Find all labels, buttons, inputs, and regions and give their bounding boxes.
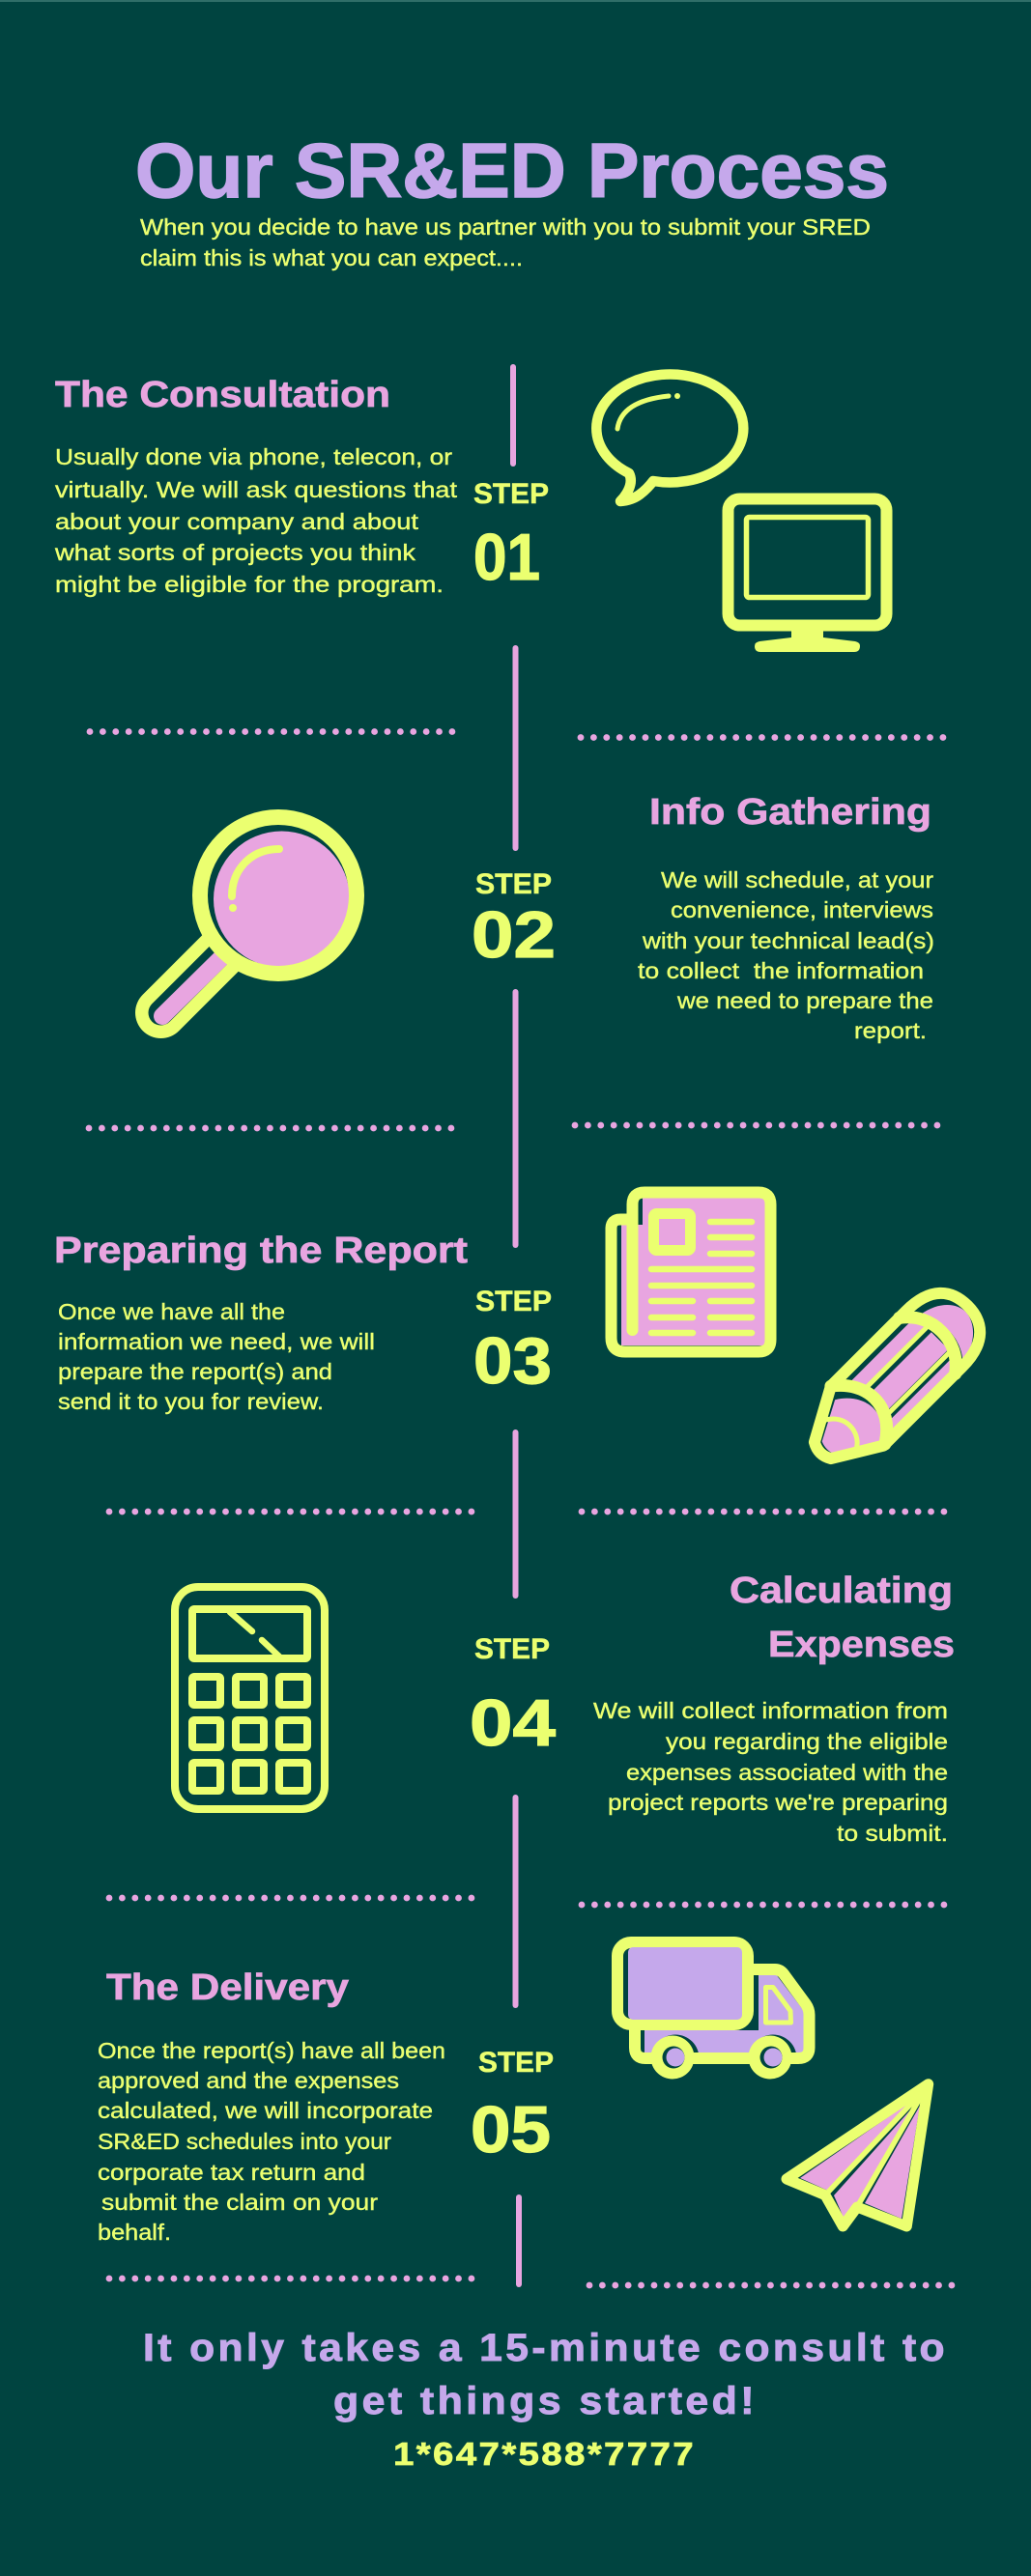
step label 02 [472, 868, 556, 972]
subtitle: claim this is what you can expect.... [140, 245, 523, 270]
step label 03: 03 [473, 1324, 552, 1398]
text block: expenses description: expenses associated with the [626, 1760, 948, 1785]
icon: delivery truck [617, 1942, 810, 2082]
step label 03: STEP [475, 1286, 552, 1317]
text block: report description: Once we have all the [58, 1299, 285, 1324]
text block: expenses description: We will collect information from [593, 1698, 948, 1723]
text block: info gathering description: with your technical lead(s) [642, 928, 934, 953]
step label 01: 01 [473, 521, 540, 594]
step label 04 [470, 1633, 556, 1760]
panel: step 1 the consultation [54, 374, 887, 652]
text block: expenses description: project reports we're preparing [608, 1790, 948, 1815]
heading: calculating expenses: Calculating [730, 1571, 953, 1611]
heading: the consultation: The Consultation [55, 375, 390, 415]
subtitle: When you decide to have us partner with you to submit your SRED [140, 214, 871, 240]
step label 01: STEP [473, 478, 549, 510]
icon: newspaper [611, 1192, 771, 1352]
icon: speech bubble [596, 374, 743, 501]
text block: consultation description [54, 444, 458, 597]
callout: closing message [143, 2327, 948, 2472]
icon: paper plane [787, 2084, 929, 2226]
text block: expenses description: to submit. [837, 1821, 948, 1846]
icon: magnifying glass [160, 817, 358, 1016]
text block: info gathering description: to collect the information [638, 958, 924, 983]
text block: consultation description: might be eligible for the program. [55, 572, 444, 597]
text block: delivery description: calculated, we will incorporate [98, 2098, 433, 2123]
panel: step 2 info gathering [160, 792, 934, 1043]
heading: calculating expenses: Expenses [768, 1625, 955, 1665]
text block: consultation description: virtually. We will ask questions that [55, 477, 458, 502]
text block: info gathering description: we need to prepare the [676, 988, 933, 1013]
text block: delivery description: approved and the expenses [98, 2068, 399, 2093]
step label 05: 05 [471, 2093, 551, 2166]
icon: calculator [175, 1587, 325, 1809]
text block: info gathering description [638, 867, 934, 1043]
heading: the delivery: The Delivery [106, 1967, 349, 2008]
step label 02: STEP [475, 868, 552, 900]
step label 05: STEP [478, 2047, 554, 2079]
step label 01 [473, 478, 549, 594]
panel: step 5 the delivery [98, 1942, 929, 2245]
text block: delivery description: behalf. [98, 2220, 171, 2245]
text block: report description: prepare the report(s) and [58, 1359, 332, 1384]
step label 02: 02 [472, 898, 556, 972]
text block: delivery description: Once the report(s) have all been [98, 2038, 445, 2063]
step label 03 [473, 1286, 552, 1398]
panel: step 3 preparing the report [54, 1192, 995, 1481]
heading: preparing the report: Preparing the Report [54, 1231, 468, 1271]
step label 04: 04 [470, 1686, 556, 1760]
text block: consultation description: what sorts of projects you think [54, 540, 416, 565]
phone number: 1*647*588*7777 [393, 2436, 696, 2472]
step label 04: STEP [474, 1633, 550, 1665]
text block: report description: information we need, we will [58, 1329, 375, 1354]
heading: calculating expenses [730, 1571, 955, 1665]
text block: info gathering description: convenience, interviews [671, 897, 933, 922]
text block: report description [58, 1299, 375, 1414]
panel: step 4 calculating expenses [175, 1571, 955, 1846]
callout: closing message: get things started! [333, 2380, 758, 2422]
text block: consultation description: about your company and about [55, 509, 419, 534]
title: Our SR&ED Process [135, 127, 889, 213]
icon: computer monitor [729, 498, 887, 652]
text block: consultation description: Usually done via phone, telecon, or [55, 444, 452, 469]
text block: delivery description: SR&ED schedules into your [98, 2129, 391, 2154]
text block: expenses description: you regarding the eligible [666, 1729, 948, 1754]
subtitle [140, 214, 871, 270]
text block: delivery description: corporate tax return and [98, 2160, 365, 2185]
text block: info gathering description: We will schedule, at your [661, 867, 933, 892]
timeline: central vertical segments [513, 367, 519, 2284]
callout: closing message: It only takes a 15-minute consult to [143, 2327, 948, 2369]
icon: pencil [792, 1278, 995, 1481]
text block: expenses description [593, 1698, 948, 1846]
text block: delivery description [98, 2038, 445, 2245]
heading: info gathering: Info Gathering [649, 792, 931, 833]
step label 05 [471, 2047, 554, 2166]
text block: delivery description: submit the claim on your [101, 2190, 378, 2215]
text block: info gathering description: report. [854, 1018, 927, 1043]
text block: report description: send it to you for review. [58, 1389, 324, 1414]
